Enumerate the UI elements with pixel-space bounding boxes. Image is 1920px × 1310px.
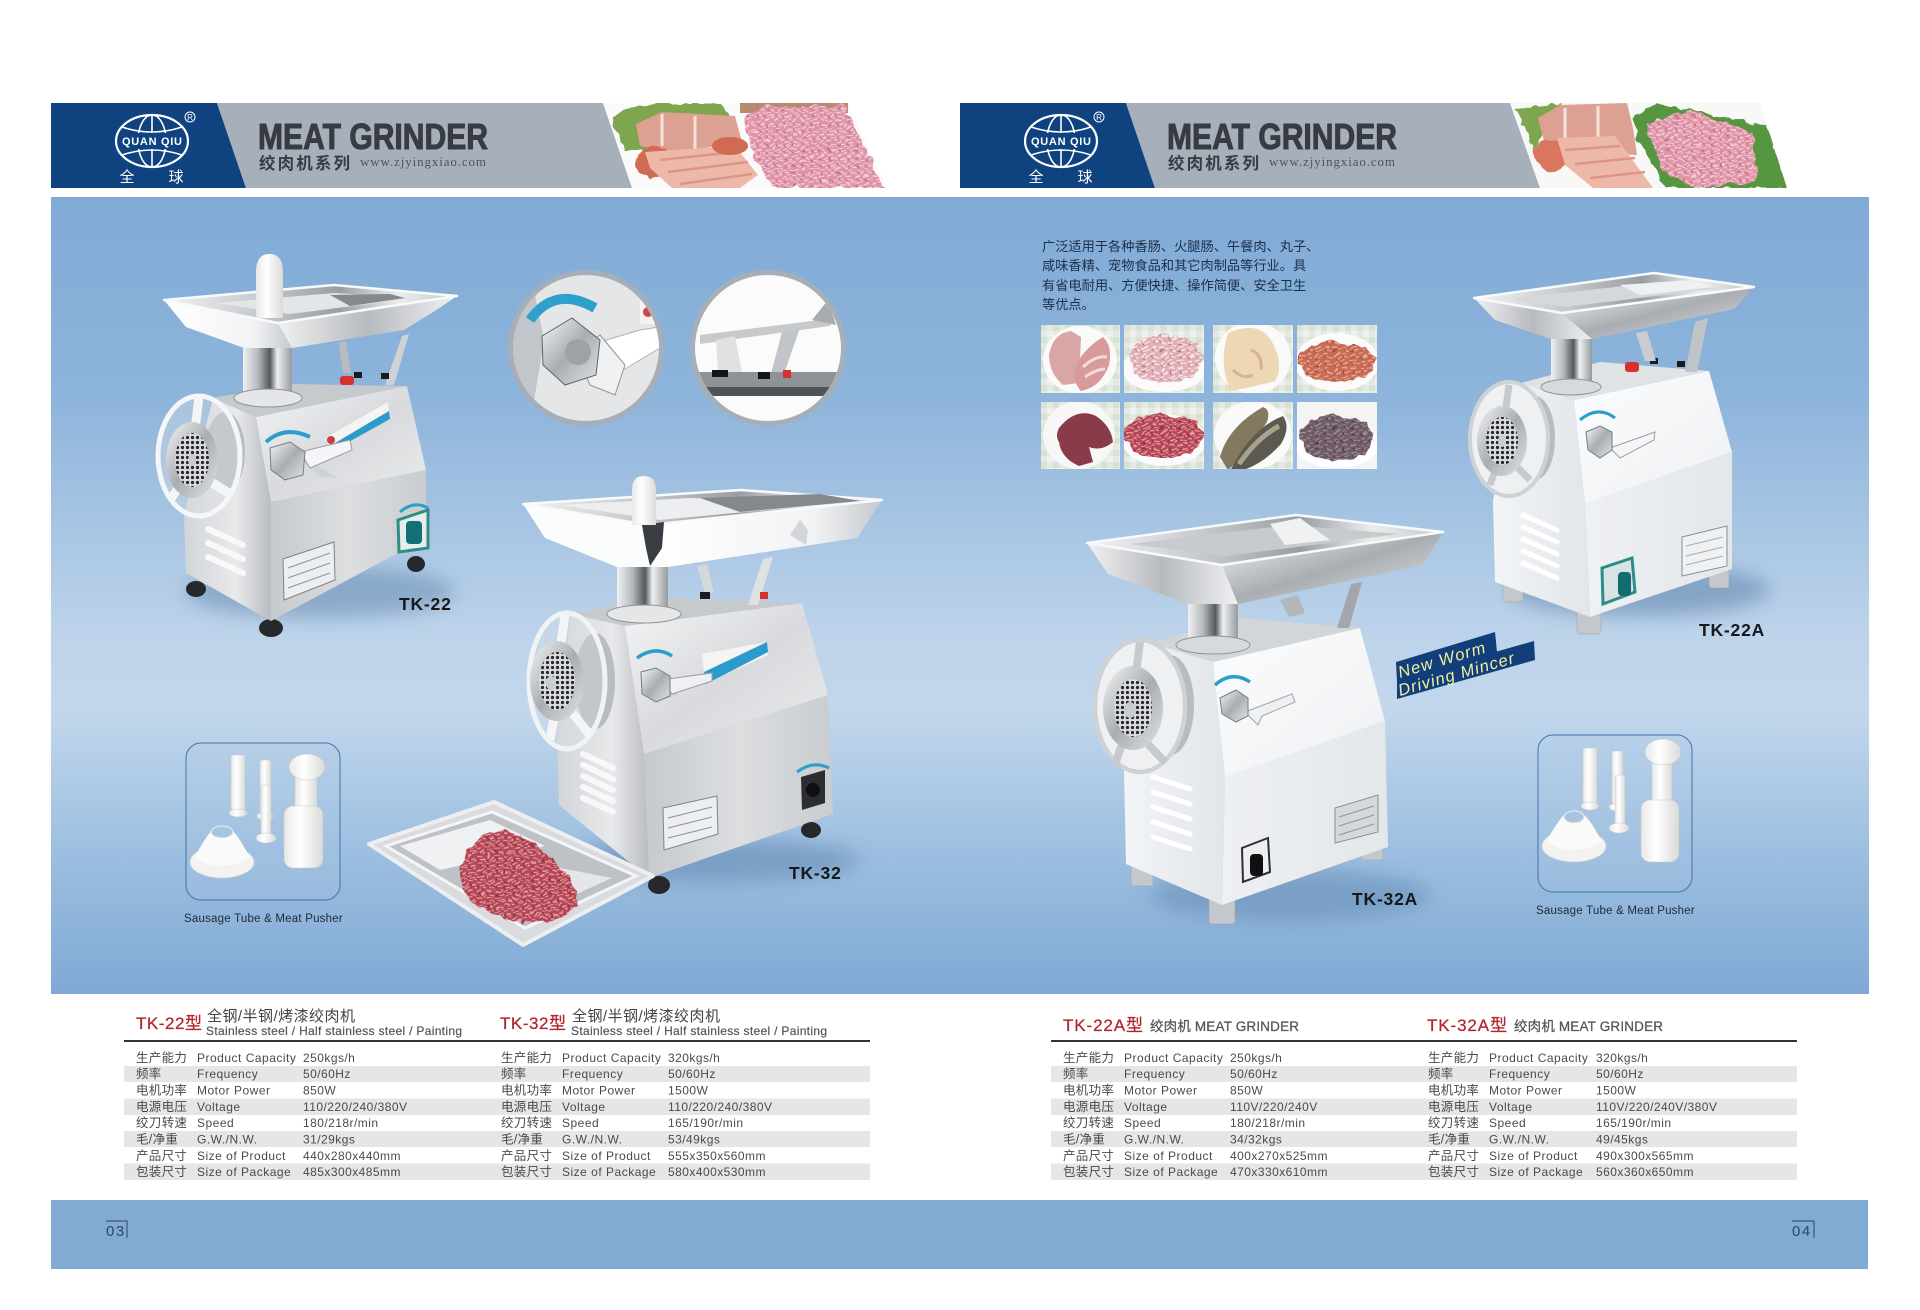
- switch: [1242, 838, 1270, 882]
- TK-32A rows: Size of Package: [1489, 1165, 1583, 1179]
- photo: minced fish: [1297, 402, 1377, 469]
- top buttons: [340, 372, 389, 385]
- TK-32A rows: Motor Power: [1489, 1084, 1563, 1098]
- website: www.zjyingxiao.com: [360, 154, 486, 169]
- TK-32 heading: TK-32型: [500, 1014, 566, 1033]
- TK-22 rows: 频率: [136, 1066, 162, 1081]
- TK-32 rows: Voltage: [562, 1100, 606, 1114]
- TK-32A rows: [1428, 1051, 1717, 1179]
- neck column: [243, 346, 292, 394]
- TK-22 rows: 包装尺寸: [136, 1165, 187, 1179]
- TK-22 rows: Speed: [197, 1116, 234, 1130]
- spec table: TK-32A: [1427, 1016, 1717, 1179]
- TK-22 rows: 250kgs/h: [303, 1051, 355, 1065]
- neck column: [617, 564, 668, 614]
- page number 03: 03: [106, 1223, 126, 1240]
- TK-22A rows: G.W./N.W.: [1124, 1132, 1184, 1146]
- label TK-32A: TK-32A: [1352, 889, 1418, 909]
- hopper tray: [523, 490, 882, 567]
- caption left: Sausage Tube & Meat Pusher: [184, 913, 343, 925]
- TK-32 rows: Speed: [562, 1116, 599, 1130]
- subtitle chinese: 绞肉机系列: [259, 153, 350, 173]
- badge: New Worm Driving Mincer: New Worm: [1396, 639, 1489, 682]
- sticker: [327, 402, 390, 453]
- machine: TK-22A: [1470, 273, 1770, 634]
- TK-32A rows: 毛/净重: [1428, 1132, 1470, 1146]
- TK-22 rows: G.W./N.W.: [197, 1132, 258, 1146]
- wheel and plate: [1470, 382, 1555, 496]
- TK-22A rows: 400x270x525mm: [1230, 1149, 1328, 1163]
- TK-32A rows: 320kgs/h: [1596, 1051, 1648, 1065]
- TK-32A rows: 50/60Hz: [1596, 1067, 1644, 1081]
- switch: [398, 505, 428, 552]
- funnel cone: [1542, 811, 1606, 862]
- photo: fish: [1213, 402, 1293, 469]
- spec rules and shaded rows right: [1051, 1040, 1797, 1180]
- TK-22A rows: 180/218r/min: [1230, 1116, 1305, 1130]
- TK-22 rows: 180/218r/min: [303, 1116, 378, 1130]
- description paragraph: [1042, 239, 1319, 312]
- banner meat photo: [1505, 103, 1795, 188]
- TK-32A rows: 490x300x565mm: [1596, 1149, 1694, 1163]
- wheel and plate: [529, 613, 615, 749]
- TK-32 rows: 53/49kgs: [668, 1132, 720, 1146]
- spec rules and shaded rows left: [124, 1040, 870, 1180]
- caption right: Sausage Tube & Meat Pusher: [1536, 905, 1695, 917]
- machine body: [557, 614, 649, 878]
- detail circle: legs: [690, 270, 846, 426]
- TK-22A heading: TK-22A型: [1063, 1016, 1143, 1035]
- description paragraph: 有省电耐用、方便快捷、操作简便、安全卫生: [1042, 277, 1306, 293]
- top buttons: [700, 592, 768, 599]
- TK-22A rows: [1063, 1051, 1328, 1179]
- TK-32 rows: 320kgs/h: [668, 1051, 720, 1065]
- banner gray title block: [217, 103, 632, 188]
- TK-22 rows: 50/60Hz: [303, 1067, 351, 1081]
- TK-32 rows: 555x350x560mm: [668, 1149, 766, 1163]
- TK-22 rows: Motor Power: [197, 1084, 271, 1098]
- feet: [186, 556, 425, 637]
- TK-32 heading: Stainless steel / Half stainless steel / Painting: [571, 1024, 827, 1038]
- TK-22A rows: Product Capacity: [1124, 1051, 1223, 1065]
- switch: [797, 765, 829, 810]
- logo: Quan Qiu globe: R: [1096, 113, 1102, 122]
- TK-32A rows: 绞刀转速: [1428, 1115, 1479, 1130]
- spec table: TK-32: [500, 1007, 827, 1179]
- TK-22A rows: 250kgs/h: [1230, 1051, 1282, 1065]
- TK-22 rows: 850W: [303, 1084, 336, 1098]
- meat pusher: [284, 754, 325, 868]
- TK-32 rows: G.W./N.W.: [562, 1132, 622, 1146]
- TK-22A rows: Motor Power: [1124, 1084, 1198, 1098]
- label TK-22: TK-22: [399, 594, 452, 614]
- photo: minced red: [1124, 402, 1204, 469]
- TK-22A rows: 34/32kgs: [1230, 1132, 1282, 1146]
- wheel and plate: [1095, 640, 1194, 772]
- TK-22 heading: 全钢/半钢/烤漆绞肉机: [207, 1007, 355, 1025]
- TK-32 rows: 580x400x530mm: [668, 1165, 766, 1179]
- machine body: [1124, 643, 1225, 905]
- wheel and plate: [158, 396, 245, 516]
- TK-22 rows: [136, 1051, 407, 1179]
- TK-32 rows: 50/60Hz: [668, 1067, 716, 1081]
- pusher: [632, 476, 656, 525]
- TK-22A rows: 产品尺寸: [1063, 1149, 1114, 1163]
- TK-32A heading: TK-32A型: [1427, 1016, 1507, 1035]
- TK-32A rows: Frequency: [1489, 1067, 1550, 1081]
- pusher: [256, 254, 283, 318]
- leg supports: [1685, 318, 1708, 372]
- TK-32 rows: 产品尺寸: [501, 1149, 552, 1163]
- TK-32 rows: 电机功率: [501, 1082, 552, 1098]
- TK-32A rows: 1500W: [1596, 1084, 1636, 1098]
- panel: blue product background: [51, 197, 1869, 994]
- TK-22A rows: 110V/220/240V: [1230, 1100, 1318, 1114]
- TK-32A rows: 560x360x650mm: [1596, 1165, 1694, 1179]
- nameplate: [1335, 795, 1378, 843]
- website: www.zjyingxiao.com: [1269, 154, 1395, 169]
- TK-32A rows: 电源电压: [1428, 1100, 1479, 1114]
- TK-22 heading: Stainless steel / Half stainless steel / Painting: [206, 1024, 462, 1038]
- footer band: [51, 1200, 1868, 1269]
- leg supports: [385, 334, 409, 385]
- TK-32A rows: G.W./N.W.: [1489, 1132, 1550, 1146]
- machine: TK-22: [158, 254, 457, 637]
- label TK-22A: TK-22A: [1699, 620, 1765, 640]
- TK-22 rows: 485x300x485mm: [303, 1165, 401, 1179]
- TK-22A heading: [1063, 1016, 1299, 1035]
- TK-22A rows: Size of Package: [1124, 1165, 1218, 1179]
- TK-22A rows: Speed: [1124, 1116, 1161, 1130]
- TK-22 rows: 绞刀转速: [136, 1115, 187, 1130]
- logo: Quan Qiu globe: QUAN QIU: [122, 136, 182, 148]
- TK-22 heading: TK-22型: [136, 1014, 202, 1033]
- photo: pork: [1041, 325, 1120, 393]
- TK-32 rows: 频率: [501, 1066, 527, 1081]
- steel meat tray: [369, 802, 653, 945]
- TK-32 heading: 全钢/半钢/烤漆绞肉机: [572, 1007, 720, 1025]
- logo: Quan Qiu globe: [1025, 112, 1104, 186]
- TK-32 rows: Motor Power: [562, 1084, 636, 1098]
- TK-22A rows: Frequency: [1124, 1067, 1185, 1081]
- TK-32 rows: [501, 1051, 772, 1179]
- TK-22 rows: 毛/净重: [136, 1132, 178, 1146]
- accessories box right: [1538, 735, 1692, 892]
- TK-22 rows: 电源电压: [136, 1100, 187, 1114]
- TK-22A rows: 470x330x610mm: [1230, 1165, 1328, 1179]
- detail circle: knob: [508, 270, 665, 426]
- banner gray title block: [1126, 103, 1540, 188]
- TK-22A rows: 850W: [1230, 1084, 1263, 1098]
- TK-22A heading: 绞肉机 MEAT GRINDER: [1150, 1018, 1299, 1034]
- title: MEAT GRINDER: [258, 116, 488, 157]
- badge: New Worm Driving Mincer: [1396, 632, 1535, 700]
- TK-32A rows: Product Capacity: [1489, 1051, 1588, 1065]
- hopper tray: [164, 285, 457, 348]
- knob and handle: [266, 432, 352, 480]
- logo: Quan Qiu globe: 球: [168, 169, 184, 186]
- description paragraph: 广泛适用于各种香肠、火腿肠、午餐肉、丸子、: [1042, 239, 1319, 254]
- banner blue logo block: [51, 103, 246, 188]
- logo: Quan Qiu globe: [116, 112, 195, 186]
- description paragraph: 等优点。: [1042, 296, 1095, 312]
- top buttons: [1625, 358, 1685, 372]
- TK-32A rows: Speed: [1489, 1116, 1526, 1130]
- page number 04: 04: [1792, 1223, 1812, 1240]
- nameplate: [283, 542, 335, 600]
- TK-22 rows: 电机功率: [136, 1082, 187, 1098]
- banner meat photo: [600, 103, 890, 188]
- TK-32 rows: 绞刀转速: [501, 1115, 552, 1130]
- logo: Quan Qiu globe: 球: [1077, 169, 1093, 186]
- logo: Quan Qiu globe: 全: [1028, 168, 1044, 186]
- TK-22 rows: Size of Package: [197, 1165, 291, 1179]
- TK-22A rows: 生产能力: [1063, 1051, 1114, 1065]
- TK-32 rows: Size of Package: [562, 1165, 656, 1179]
- sticker: [702, 642, 768, 683]
- neck column: [1188, 600, 1238, 647]
- TK-32A heading: [1427, 1016, 1663, 1035]
- feet: [1131, 838, 1383, 924]
- TK-22A rows: 毛/净重: [1063, 1132, 1105, 1146]
- TK-32A rows: 包装尺寸: [1428, 1165, 1479, 1179]
- TK-32 rows: 生产能力: [501, 1051, 552, 1065]
- sausage tubes: [1581, 748, 1629, 833]
- banner blue logo block: [960, 103, 1155, 188]
- meat pusher: [1641, 739, 1681, 862]
- neck column: [1551, 337, 1592, 385]
- TK-32A rows: 110V/220/240V/380V: [1596, 1100, 1717, 1114]
- photo: minced pork: [1124, 325, 1204, 393]
- TK-22 rows: 生产能力: [136, 1051, 187, 1065]
- TK-32 rows: Product Capacity: [562, 1051, 661, 1065]
- photo grid: meats: [1041, 322, 1379, 470]
- label TK-32: TK-32: [789, 863, 842, 883]
- machine: TK-32 with meat tray: [369, 476, 882, 945]
- TK-22A rows: Size of Product: [1124, 1149, 1213, 1163]
- TK-22A rows: 50/60Hz: [1230, 1067, 1278, 1081]
- TK-32 rows: 110/220/240/380V: [668, 1100, 772, 1114]
- nameplate: [1682, 526, 1727, 576]
- knob and handle: [637, 651, 712, 702]
- accessories box left: [186, 743, 340, 900]
- sausage tubes: [229, 755, 276, 843]
- TK-32 rows: 1500W: [668, 1084, 708, 1098]
- TK-32 heading: [500, 1007, 827, 1038]
- title: MEAT GRINDER: [1167, 116, 1397, 157]
- banner: left page header: [51, 103, 890, 188]
- banner: right page header: [960, 103, 1795, 188]
- hopper tray: [1474, 273, 1754, 339]
- TK-32 rows: 电源电压: [501, 1100, 552, 1114]
- TK-32A rows: 电机功率: [1428, 1082, 1479, 1098]
- feet: [1503, 566, 1729, 634]
- feet: [648, 822, 821, 894]
- photo: beef: [1041, 402, 1120, 469]
- TK-32A heading: 绞肉机 MEAT GRINDER: [1514, 1018, 1663, 1034]
- TK-32A rows: 49/45kgs: [1596, 1132, 1648, 1146]
- spec table: TK-22: [136, 1007, 462, 1179]
- TK-32A rows: 产品尺寸: [1428, 1149, 1479, 1163]
- TK-22A rows: 绞刀转速: [1063, 1115, 1114, 1130]
- machine body: [184, 398, 271, 621]
- TK-22 rows: 110/220/240/380V: [303, 1100, 407, 1114]
- TK-22A rows: 频率: [1063, 1066, 1089, 1081]
- TK-22A rows: 包装尺寸: [1063, 1165, 1114, 1179]
- TK-32 rows: 包装尺寸: [501, 1165, 552, 1179]
- TK-22A rows: 电源电压: [1063, 1100, 1114, 1114]
- TK-22 rows: 31/29kgs: [303, 1132, 355, 1146]
- leg supports: [1337, 582, 1362, 628]
- logo: Quan Qiu globe: R: [187, 113, 193, 122]
- logo: Quan Qiu globe: 全: [119, 168, 135, 186]
- TK-32A rows: Size of Product: [1489, 1149, 1578, 1163]
- TK-22 rows: Voltage: [197, 1100, 241, 1114]
- TK-32A rows: 165/190r/min: [1596, 1116, 1671, 1130]
- TK-32 rows: 165/190r/min: [668, 1116, 743, 1130]
- knob and handle: [1580, 412, 1655, 458]
- description paragraph: 咸味香精、宠物食品和其它肉制品等行业。具: [1042, 257, 1306, 273]
- spec table: TK-22A: [1063, 1016, 1328, 1179]
- TK-32 rows: Size of Product: [562, 1149, 651, 1163]
- switch: [1602, 558, 1635, 604]
- logo: Quan Qiu globe: QUAN QIU: [1031, 136, 1091, 148]
- TK-22 rows: Product Capacity: [197, 1051, 296, 1065]
- TK-32 rows: Frequency: [562, 1067, 623, 1081]
- TK-22 rows: Frequency: [197, 1067, 258, 1081]
- TK-32A rows: 生产能力: [1428, 1051, 1479, 1065]
- minced meat: [458, 831, 576, 922]
- TK-22 rows: 产品尺寸: [136, 1149, 187, 1163]
- TK-22A rows: 电机功率: [1063, 1082, 1114, 1098]
- photo: minced red-orange: [1297, 325, 1377, 393]
- TK-32A rows: 频率: [1428, 1066, 1454, 1081]
- TK-22 rows: Size of Product: [197, 1149, 286, 1163]
- TK-32A rows: Voltage: [1489, 1100, 1533, 1114]
- TK-22A rows: Voltage: [1124, 1100, 1168, 1114]
- machine: TK-32A: [1087, 515, 1443, 924]
- photo: chicken: [1213, 325, 1293, 393]
- nameplate: [663, 796, 718, 850]
- funnel cone: [190, 826, 254, 878]
- TK-22 rows: 440x280x440mm: [303, 1149, 401, 1163]
- machine body: [1493, 383, 1590, 617]
- knob and handle: [1215, 677, 1295, 725]
- badge: New Worm Driving Mincer: Driving Mincer: [1396, 649, 1518, 700]
- TK-32 rows: 毛/净重: [501, 1132, 543, 1146]
- hopper tray: [1087, 515, 1443, 604]
- TK-22 heading: [136, 1007, 462, 1038]
- subtitle chinese: 绞肉机系列: [1168, 153, 1259, 173]
- leg supports: [748, 557, 773, 605]
